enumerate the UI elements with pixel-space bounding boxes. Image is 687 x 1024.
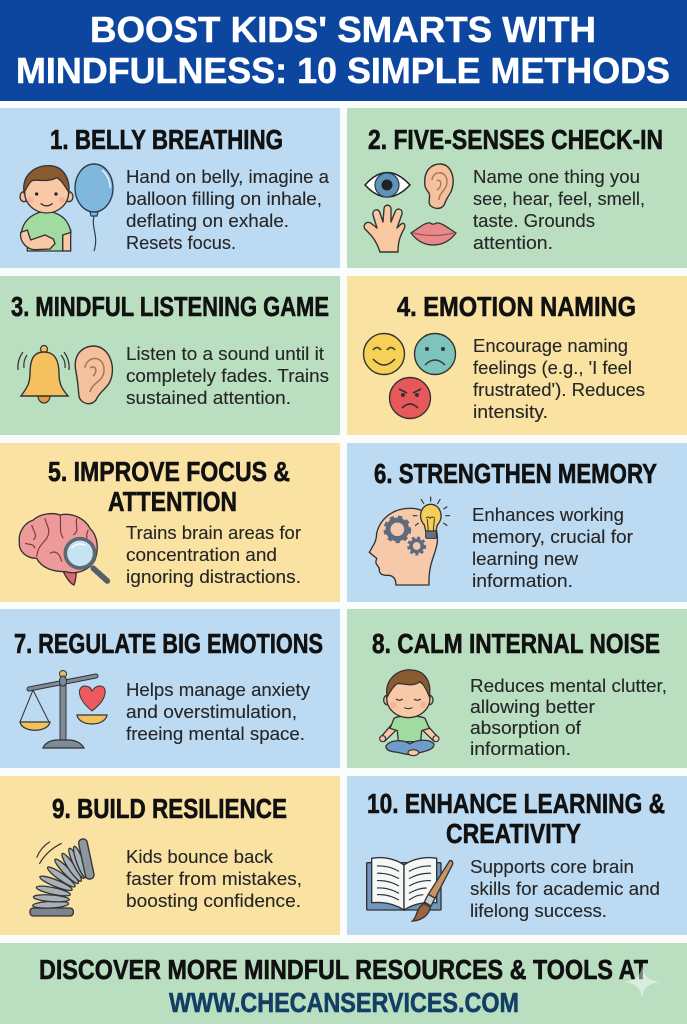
footer url: WWW.CHECANSERVICES.COM	[169, 987, 519, 1018]
description 7: and overstimulation,	[126, 701, 297, 722]
panel: 6 strengthen memory	[347, 443, 687, 602]
description 1	[126, 166, 330, 253]
description 6: information.	[472, 570, 573, 591]
heading: enhance learning: CREATIVITY	[446, 818, 581, 849]
description 1: deflating on exhale.	[126, 210, 289, 231]
description 3	[126, 343, 329, 408]
heading: improve focus: 5. IMPROVE FOCUS &	[48, 456, 290, 487]
icon: balance scale with heart	[20, 670, 107, 748]
icon: ear	[425, 164, 453, 208]
panel: 2 five-senses check-in	[347, 108, 687, 268]
heading: mindful listening: 3. MINDFUL LISTENING GAME	[11, 291, 329, 322]
description 1: Hand on belly, imagine a	[126, 166, 330, 187]
panel: 8 calm internal noise	[347, 609, 687, 768]
icon: hand	[364, 205, 405, 252]
description 7: freeing mental space.	[126, 723, 305, 744]
description 3: Listen to a sound until it	[126, 343, 324, 364]
description 4: Encourage naming	[473, 335, 628, 356]
panel: 1 belly breathing	[0, 108, 340, 268]
panel: 7 regulate big emotions	[0, 609, 340, 768]
panel: 3 mindful listening game	[0, 276, 340, 435]
description 10	[470, 856, 660, 921]
description 8: allowing better	[470, 696, 595, 717]
description 2: attention.	[473, 232, 553, 253]
description 2: see, hear, feel, smell,	[473, 188, 645, 209]
icon: brain with magnifier	[19, 514, 107, 585]
heading: regulate emotions: 7. REGULATE BIG EMOTIONS	[14, 628, 323, 659]
description 6: learning new	[472, 548, 579, 569]
description 9: Kids bounce back	[126, 846, 274, 867]
description 2: taste. Grounds	[473, 210, 595, 231]
heading: improve focus: ATTENTION	[108, 486, 237, 517]
icon: open book and paintbrush	[367, 858, 453, 921]
icon: sad face	[414, 334, 456, 374]
icon: meditating child	[380, 670, 439, 756]
description 6: memory, crucial for	[472, 526, 633, 547]
icon: balloon	[75, 164, 113, 251]
panel: 10 enhance learning and creativity	[347, 776, 687, 935]
icon: happy face	[364, 334, 404, 374]
description 3: completely fades. Trains	[126, 365, 329, 386]
icon: lips	[411, 223, 456, 245]
description 9: boosting confidence.	[126, 890, 301, 911]
description 10: lifelong success.	[470, 900, 607, 921]
heading: belly breathing: 1. BELLY BREATHING	[50, 124, 283, 155]
panel: 9 build resilience	[0, 776, 340, 935]
description 7	[126, 679, 311, 744]
icon: slinky spring	[30, 838, 95, 916]
title: MINDFULNESS: 10 SIMPLE METHODS	[16, 50, 670, 91]
header banner	[0, 0, 687, 101]
description 5: Trains brain areas for	[126, 522, 301, 543]
description 1: Resets focus.	[126, 232, 236, 253]
footer banner	[0, 943, 687, 1024]
panel: 4 emotion naming	[347, 276, 687, 435]
heading: improve focus	[48, 456, 290, 517]
description 4: feelings (e.g., 'I feel	[473, 357, 632, 378]
heading: enhance learning	[367, 788, 665, 849]
description 8: information.	[470, 738, 571, 759]
description 3: sustained attention.	[126, 387, 291, 408]
description 5: ignoring distractions.	[126, 566, 301, 587]
description 6: Enhances working	[472, 504, 624, 525]
icon: sparkle watermark	[624, 966, 660, 998]
description 10: skills for academic and	[470, 878, 660, 899]
description 7: Helps manage anxiety	[126, 679, 311, 700]
heading: emotion naming: 4. EMOTION NAMING	[397, 291, 636, 322]
icon: ear	[75, 346, 112, 404]
icon: head with gears and lightbulb	[369, 497, 450, 585]
description 10: Supports core brain	[470, 856, 634, 877]
description 6	[472, 504, 633, 591]
description 8: absorption of	[470, 717, 582, 738]
icon: eye	[365, 172, 410, 197]
description 2: Name one thing you	[473, 166, 640, 187]
description 5	[126, 522, 301, 587]
description 4: frustrated'). Reduces	[473, 379, 645, 400]
icon: boy with hand on belly	[20, 166, 73, 251]
title: BOOST KIDS' SMARTS WITH	[90, 9, 596, 50]
description 8: Reduces mental clutter,	[470, 675, 667, 696]
panel: 5 improve focus and attention	[0, 443, 340, 602]
description 1: balloon filling on inhale,	[126, 188, 322, 209]
icon: angry face	[390, 378, 430, 418]
description 5: concentration and	[126, 544, 277, 565]
title	[16, 9, 670, 91]
icon: bell	[18, 346, 69, 403]
description 9: faster from mistakes,	[126, 868, 302, 889]
description 2	[473, 166, 645, 253]
description 8	[470, 675, 667, 759]
description 9	[126, 846, 302, 911]
description 4: intensity.	[473, 401, 548, 422]
description 4	[473, 335, 645, 422]
heading: build resilience: 9. BUILD RESILIENCE	[52, 793, 287, 824]
